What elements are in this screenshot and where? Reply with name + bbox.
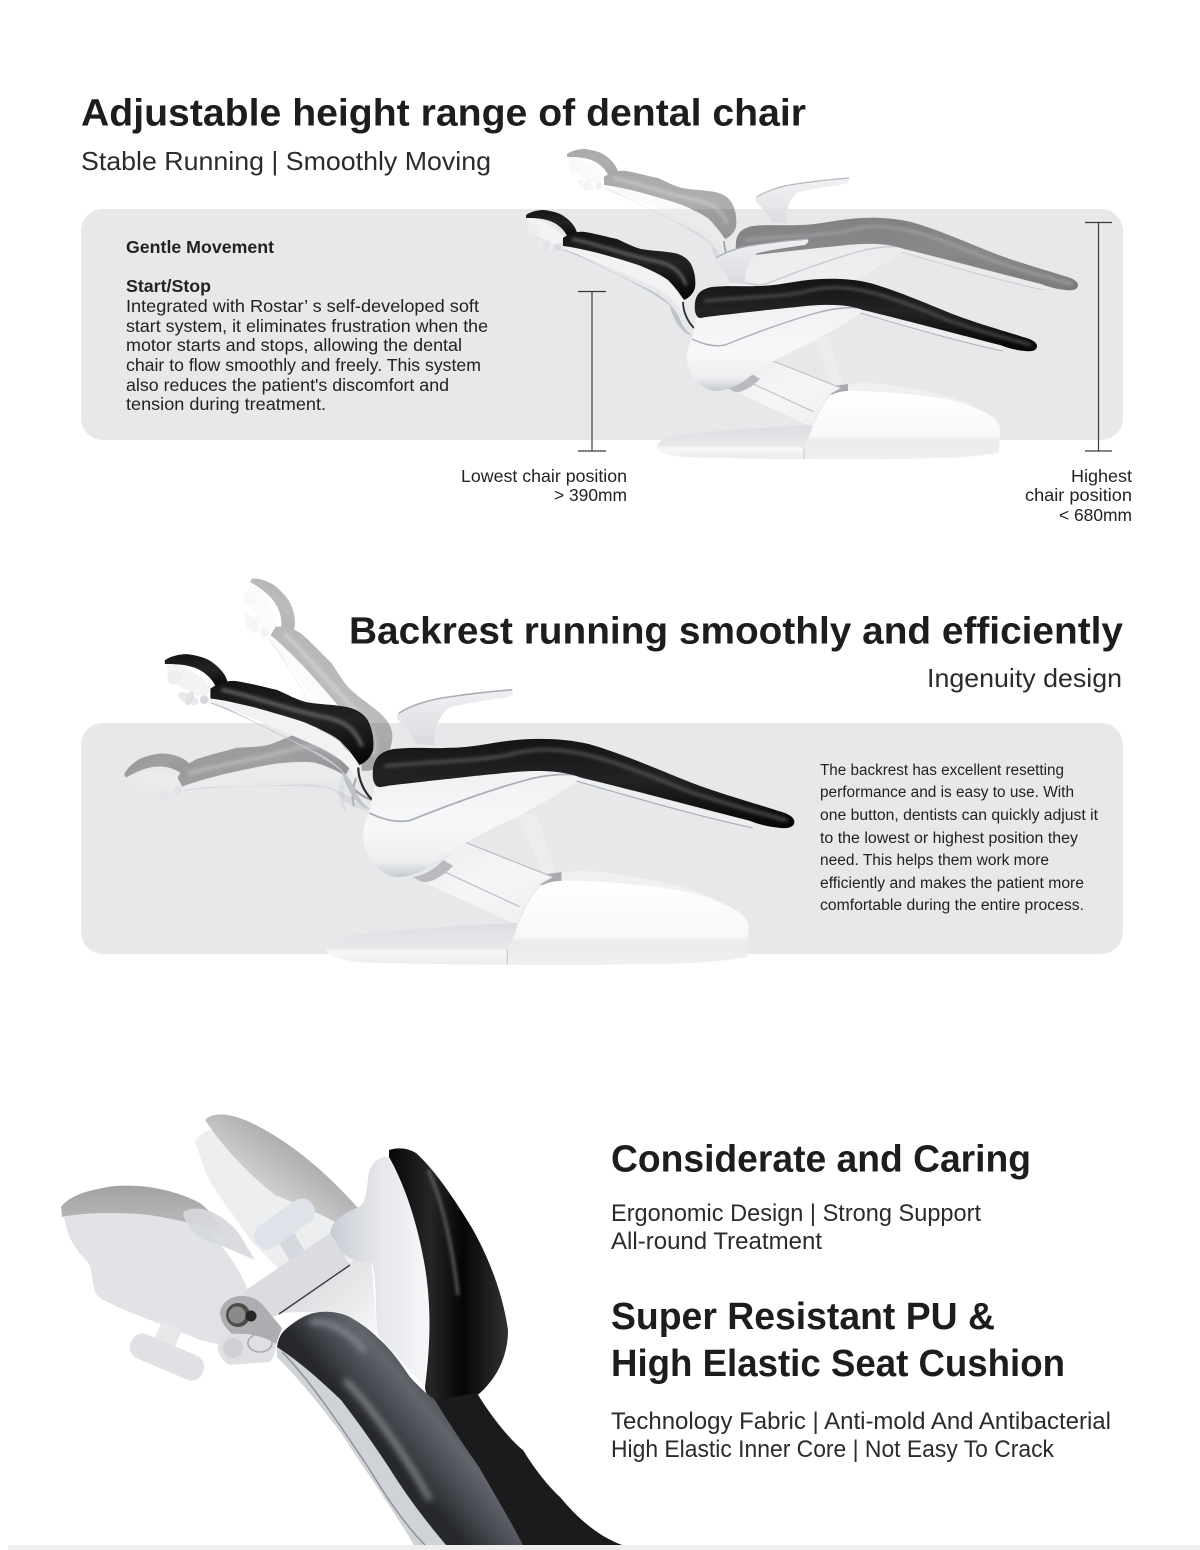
label: lowest chair position: > 390mm xyxy=(554,485,627,505)
text block: backrest description: one button, dentists can quickly adjust it xyxy=(820,807,1099,824)
ghost backrest: raised xyxy=(173,573,432,816)
white bracket arm xyxy=(243,1233,350,1322)
black seat underside xyxy=(435,1393,622,1545)
heading: backrest xyxy=(349,610,1123,693)
armrest xyxy=(397,690,513,745)
shaded area behind bracket xyxy=(279,1240,377,1335)
dimension bar: highest xyxy=(1085,222,1112,451)
label: lowest chair position: Lowest chair position xyxy=(461,466,627,486)
text block: gentle movement: also reduces the patient's discomfort and xyxy=(126,375,449,395)
heading: adjustable height: Adjustable height range of dental chair xyxy=(81,92,806,134)
text block: gentle movement xyxy=(126,237,488,414)
text block: backrest description: comfortable during the entire process. xyxy=(820,897,1084,914)
label: highest chair position: Highest xyxy=(1071,466,1132,486)
ghost knob: left xyxy=(184,1264,232,1335)
metal pivot xyxy=(218,1296,282,1365)
heading: considerate and caring xyxy=(611,1138,1031,1255)
heading: considerate and caring: All-round Treatment xyxy=(611,1228,822,1255)
ghost chair: highest position xyxy=(567,149,1078,330)
heading: backrest: Backrest running smoothly and efficiently xyxy=(349,610,1123,652)
heading: super resistant PU: High Elastic Seat Cushion xyxy=(611,1343,1065,1385)
heading: adjustable height: Stable Running | Smoothly Moving xyxy=(81,146,491,176)
text block: backrest description xyxy=(820,762,1099,914)
text block: gentle movement: start system, it eliminates frustration when the xyxy=(126,316,488,336)
heading: super resistant PU: Super Resistant PU & xyxy=(611,1296,995,1338)
bottom strip xyxy=(8,1545,1200,1550)
label: highest chair position: chair position xyxy=(1025,485,1132,505)
heading: considerate and caring: Ergonomic Design | Strong Support xyxy=(611,1200,981,1227)
text block: gentle movement: chair to flow smoothly and freely. This system xyxy=(126,355,481,375)
black chair: lowest position xyxy=(526,210,1037,391)
black headrest cushion xyxy=(389,1148,508,1405)
heading: considerate and caring: Considerate and Caring xyxy=(611,1138,1031,1180)
white headrest shell xyxy=(330,1157,430,1387)
chair base xyxy=(326,814,749,965)
chair illustration: height positions xyxy=(526,149,1078,459)
text block: gentle movement: Start/Stop xyxy=(126,276,211,296)
text block: gentle movement: motor starts and stops, allowing the dental xyxy=(126,335,462,355)
heading: backrest: Ingenuity design xyxy=(927,663,1122,693)
text block: backrest description: performance and is easy to use. With xyxy=(820,784,1074,801)
heading: adjustable height xyxy=(81,92,806,176)
silver edge xyxy=(277,1347,446,1545)
black chair xyxy=(165,654,794,877)
ghost knob: lower xyxy=(126,1322,208,1384)
text block: gentle movement: Integrated with Rostar’ s self-developed soft xyxy=(126,296,479,316)
text block: backrest description: to the lowest or highest position they xyxy=(820,830,1078,847)
panel: backrest xyxy=(81,723,1123,954)
chair illustration: backrest range xyxy=(121,573,794,965)
text block: gentle movement: tension during treatment. xyxy=(126,394,326,414)
heading: super resistant PU: High Elastic Inner Core | Not Easy To Crack xyxy=(611,1436,1055,1463)
chair base xyxy=(657,337,1000,459)
heading: super resistant PU xyxy=(611,1296,1111,1463)
panel: height range xyxy=(81,209,1123,440)
heading: super resistant PU: Technology Fabric | Anti-mold And Antibacterial xyxy=(611,1408,1111,1435)
leather backrest xyxy=(277,1312,523,1545)
label: highest chair position: < 680mm xyxy=(1059,505,1132,525)
text block: backrest description: The backrest has excellent resetting xyxy=(820,762,1064,779)
ghost knob: upper xyxy=(249,1194,320,1268)
text block: backrest description: efficiently and makes the patient more xyxy=(820,875,1084,892)
text block: gentle movement: Gentle Movement xyxy=(126,237,274,257)
label: highest chair position xyxy=(1025,466,1132,525)
ghost headrest: upper xyxy=(195,1114,378,1335)
dimension bar: lowest xyxy=(578,292,606,451)
ghost headrest: left xyxy=(61,1186,255,1345)
headrest close-up illustration xyxy=(61,1114,622,1545)
text block: backrest description: need. This helps them work more xyxy=(820,852,1049,869)
label: lowest chair position xyxy=(461,466,627,505)
ghost backrest: flat xyxy=(121,671,378,906)
